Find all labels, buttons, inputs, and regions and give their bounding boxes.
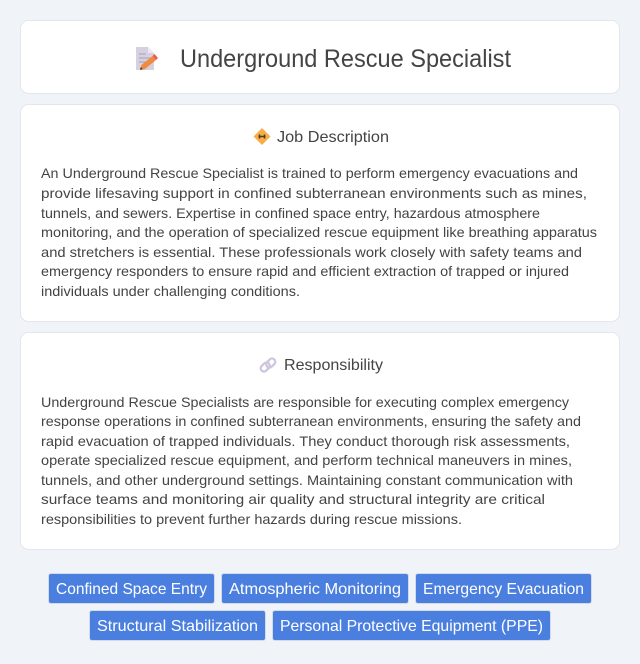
tag: confined space entry: Confined Space Entry	[56, 581, 207, 598]
text block: responsibility: operate specialized rescue equipment, and perform technical maneuvers in mines,	[41, 452, 572, 468]
panel: title	[20, 20, 620, 94]
text block: responsibility	[41, 394, 581, 527]
heading: job description: Job Description	[277, 129, 389, 146]
text block: responsibility: rapid evacuation of trapped individuals. They conduct thorough risk assessments,	[41, 433, 570, 449]
text block: job description: An Underground Rescue Specialist is trained to perform emergency evacuations and	[41, 165, 578, 181]
panel: responsibility	[20, 332, 620, 550]
tag: personal protective equipment: Personal Protective Equipment (PPE)	[280, 618, 543, 635]
tag: emergency evacuation	[416, 574, 592, 604]
tag: structural stabilization: Structural Stabilization	[97, 618, 258, 635]
text block: job description: individuals under challenging conditions.	[41, 283, 300, 299]
heading: responsibility: Responsibility	[284, 357, 383, 374]
text block: job description: and stretchers is essential. These professionals work closely with safety teams and	[41, 244, 582, 260]
icon: document with pencil	[136, 47, 158, 70]
text block: job description	[41, 165, 597, 299]
text block: job description: tunnels, and sewers. Expertise in confined space entry, hazardous atmosphere	[41, 205, 540, 221]
panel: job description	[20, 104, 620, 322]
text block: responsibility: surface teams and monitoring air quality and structural integrity are critical	[41, 491, 545, 507]
text block: responsibility: Underground Rescue Specialists are responsible for executing complex emergency	[41, 394, 569, 410]
icon: link	[259, 357, 277, 373]
tag: personal protective equipment	[272, 610, 550, 640]
tag: structural stabilization	[90, 610, 266, 640]
text block: job description: provide lifesaving support in confined subterranean environments such as mines,	[41, 185, 587, 201]
tag: confined space entry	[48, 574, 214, 604]
text block: responsibility: responsibilities to prevent further hazards during rescue missions.	[41, 511, 462, 527]
text block: job description: monitoring, and the operation of specialized rescue equipment like breathing apparatus	[41, 224, 597, 240]
text block: responsibility: tunnels, and other underground settings. Maintaining constant communication with	[41, 472, 573, 488]
text block: responsibility: response operations in confined subterranean environments, ensuring the safety and	[41, 413, 581, 429]
title text: Underground Rescue Specialist	[180, 45, 511, 73]
text block: job description: emergency responders to ensure rapid and efficient extraction of trapped or injured	[41, 263, 569, 279]
icon: warning sign	[254, 128, 270, 145]
tag: emergency evacuation: Emergency Evacuation	[423, 581, 584, 598]
tag: atmospheric monitoring	[222, 574, 408, 604]
tag: atmospheric monitoring: Atmospheric Monitoring	[229, 581, 401, 598]
